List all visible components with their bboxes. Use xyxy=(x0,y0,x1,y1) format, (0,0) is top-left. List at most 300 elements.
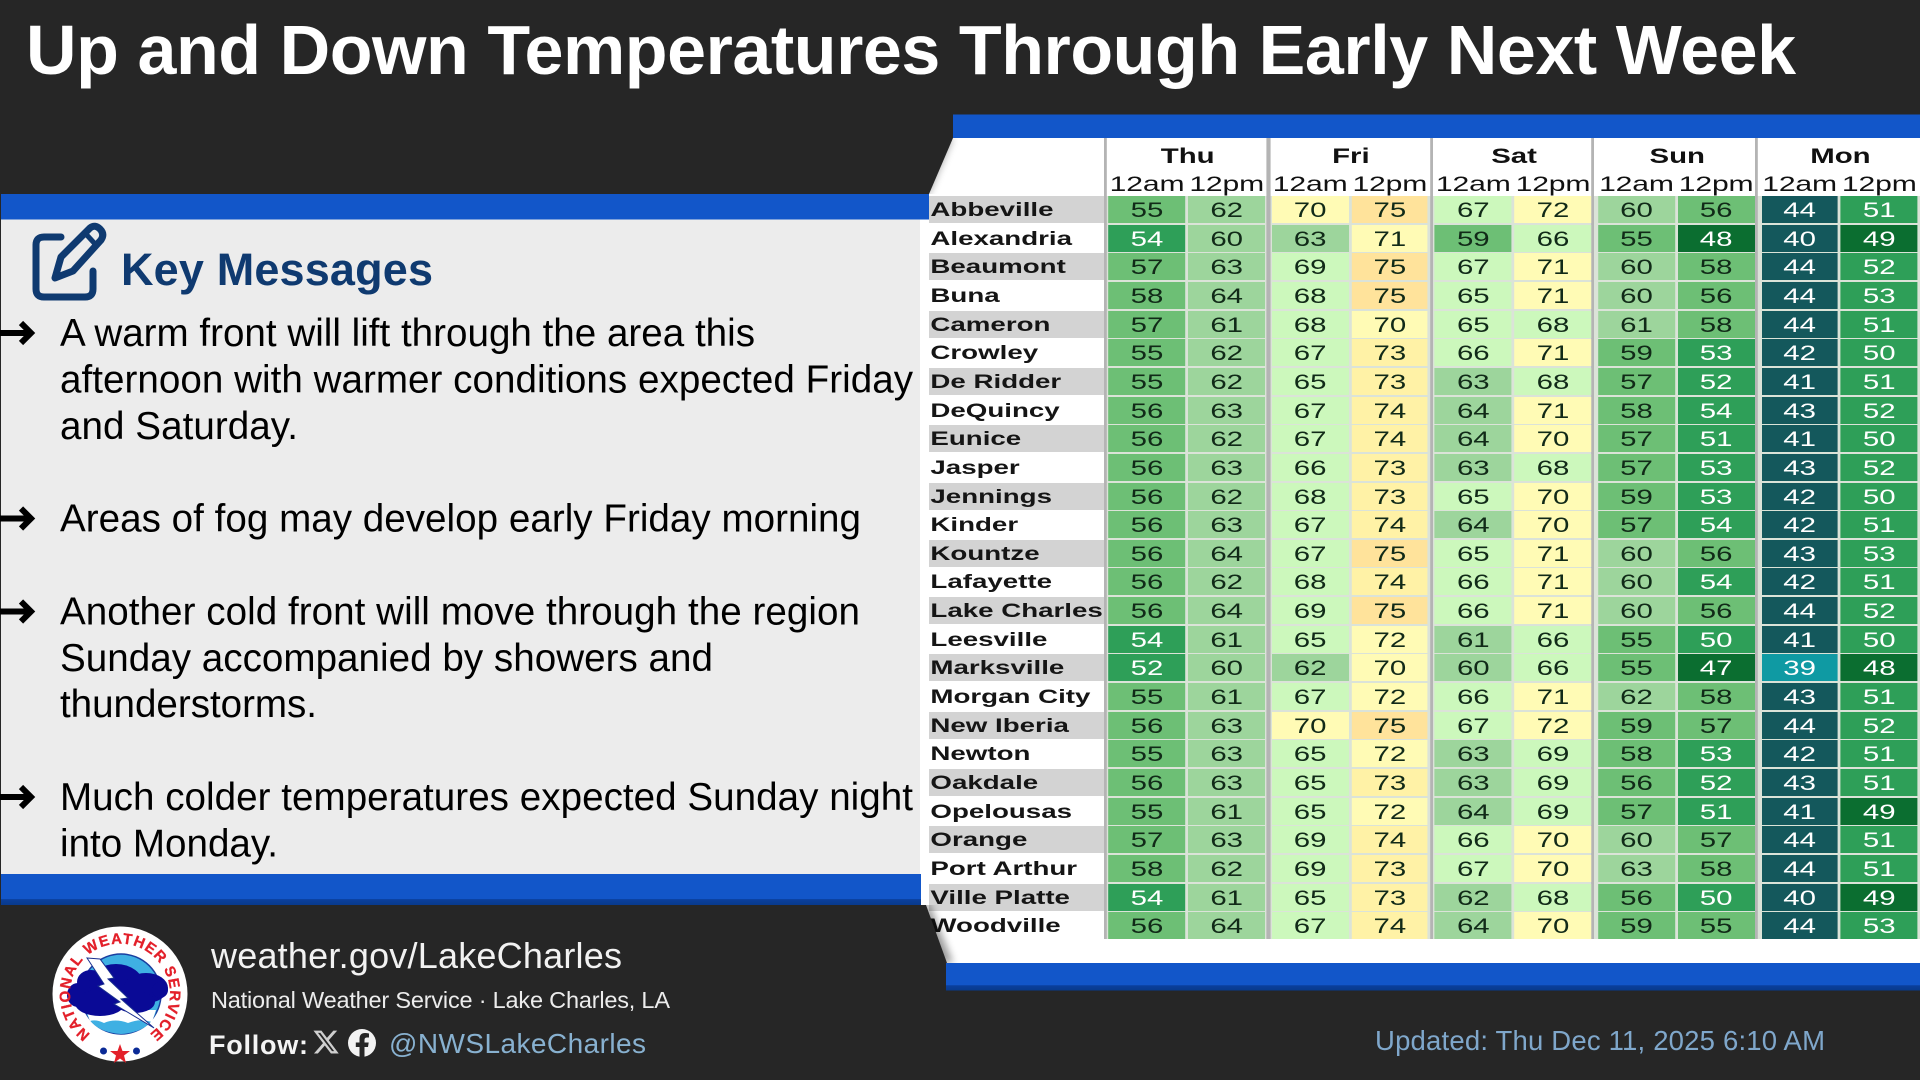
row: Morgan City: 67 xyxy=(1294,686,1327,709)
time headers: 12pm xyxy=(1352,172,1427,196)
row: Cameron: 70 xyxy=(1373,314,1406,337)
row: Oakdale: 56 xyxy=(1131,772,1163,795)
row: Opelousas: 55 xyxy=(1131,801,1163,824)
message 3: thunderstorms. xyxy=(60,683,317,726)
row: Orange: 63 xyxy=(1210,829,1243,852)
row: Lafayette: 71 xyxy=(1537,571,1569,594)
time headers: 12am xyxy=(1110,172,1184,196)
row: Abbeville: 67 xyxy=(1457,199,1490,222)
row: Abbeville xyxy=(929,196,1918,223)
row: Port Arthur: 67 xyxy=(1457,858,1490,881)
day headers: Sun xyxy=(1649,145,1705,168)
row: Buna: Buna xyxy=(930,285,1000,307)
row: Newton: 51 xyxy=(1863,743,1896,766)
row: Cameron xyxy=(929,311,1918,338)
row: Opelousas: 57 xyxy=(1620,801,1653,824)
row: Alexandria: 59 xyxy=(1457,228,1490,251)
row: New Iberia: 63 xyxy=(1210,715,1243,738)
row: Beaumont: 75 xyxy=(1373,256,1406,279)
row: Lafayette: 56 xyxy=(1131,571,1163,594)
row: Abbeville: 62 xyxy=(1210,199,1243,222)
table corner notches xyxy=(920,138,953,993)
website link: weather.gov/LakeCharles xyxy=(210,935,622,976)
row: Kountze: 56 xyxy=(1131,543,1163,566)
row: Leesville: Leesville xyxy=(930,629,1047,651)
row: Woodville: 74 xyxy=(1373,915,1406,938)
row: Morgan City: 62 xyxy=(1620,686,1653,709)
row: Lafayette: Lafayette xyxy=(930,571,1052,593)
row: Ville Platte: 40 xyxy=(1783,887,1816,910)
row: Opelousas: 64 xyxy=(1457,801,1490,824)
row: Alexandria: 48 xyxy=(1700,228,1732,251)
row: Jasper: 66 xyxy=(1294,457,1327,480)
icon: Facebook xyxy=(348,1029,376,1057)
row: DeQuincy: 63 xyxy=(1210,400,1243,423)
row: Newton: Newton xyxy=(930,743,1030,765)
row: Leesville: 61 xyxy=(1457,629,1490,652)
message 1 xyxy=(60,312,914,448)
row: Kountze: 64 xyxy=(1210,543,1243,566)
row: Opelousas: 72 xyxy=(1373,801,1406,824)
row: Lafayette: 42 xyxy=(1783,571,1816,594)
row: Leesville: 50 xyxy=(1863,629,1896,652)
row: Orange: 74 xyxy=(1373,829,1406,852)
row: Abbeville: 55 xyxy=(1131,199,1163,222)
row: Beaumont xyxy=(929,253,1918,280)
row: Buna: 65 xyxy=(1457,285,1490,308)
row: Oakdale: 43 xyxy=(1783,772,1816,795)
row: Jasper: 43 xyxy=(1783,457,1816,480)
row: Port Arthur: 63 xyxy=(1620,858,1653,881)
row: Marksville: 66 xyxy=(1537,657,1569,680)
row: Cameron: 61 xyxy=(1620,314,1653,337)
row: Orange: Orange xyxy=(930,829,1027,851)
temperature table xyxy=(929,138,1920,939)
row: Kinder: 56 xyxy=(1131,514,1163,537)
row: Abbeville: Abbeville xyxy=(930,199,1054,221)
row: Morgan City: 51 xyxy=(1863,686,1896,709)
row: De Ridder: 68 xyxy=(1537,371,1569,394)
row: Ville Platte: 56 xyxy=(1620,887,1653,910)
row: Eunice: 41 xyxy=(1783,428,1816,451)
icon: X xyxy=(313,1031,339,1053)
row: Port Arthur xyxy=(930,855,1918,882)
row: Eunice: 64 xyxy=(1457,428,1490,451)
row: Lafayette: 54 xyxy=(1700,571,1732,594)
row: Ville Platte: Ville Platte xyxy=(930,887,1070,909)
row: Marksville: 47 xyxy=(1700,657,1732,680)
time headers: 12pm xyxy=(1189,172,1264,196)
row: Oakdale: 69 xyxy=(1537,772,1569,795)
row: Leesville: 50 xyxy=(1700,629,1732,652)
row: De Ridder xyxy=(929,368,1918,395)
message 2: Areas of fog may develop early Friday morning xyxy=(60,498,861,541)
row: Port Arthur: 70 xyxy=(1537,858,1569,881)
row: Jasper: 56 xyxy=(1131,457,1163,480)
row: Port Arthur: 44 xyxy=(1783,858,1816,881)
row: Cameron: 44 xyxy=(1783,314,1816,337)
row: Newton: 72 xyxy=(1373,743,1406,766)
row: Leesville: 72 xyxy=(1373,629,1406,652)
row: Jennings: 70 xyxy=(1537,486,1569,508)
row: Crowley: 53 xyxy=(1700,342,1732,365)
message 4: into Monday. xyxy=(60,822,278,865)
row: Crowley: 71 xyxy=(1537,342,1569,365)
row: Woodville: 64 xyxy=(1457,915,1490,938)
row: Oakdale: Oakdale xyxy=(930,772,1038,794)
row: Beaumont: Beaumont xyxy=(930,256,1066,278)
time headers: 12am xyxy=(1273,172,1348,196)
row: Beaumont: 60 xyxy=(1620,256,1653,279)
row: Morgan City: Morgan City xyxy=(930,686,1090,708)
row: Marksville: Marksville xyxy=(930,657,1064,679)
row: Lake Charles: Lake Charles xyxy=(930,600,1103,622)
row: Orange: 44 xyxy=(1783,829,1816,852)
row: Eunice: 70 xyxy=(1537,428,1569,451)
row: Leesville xyxy=(930,626,1918,653)
row: Leesville: 66 xyxy=(1537,629,1569,652)
row: Alexandria: Alexandria xyxy=(930,228,1072,250)
row: Eunice: 67 xyxy=(1294,428,1327,451)
row: Newton xyxy=(930,740,1918,767)
row: Beaumont: 58 xyxy=(1700,256,1732,279)
row: Jasper: 52 xyxy=(1863,457,1896,480)
row: Alexandria: 60 xyxy=(1210,228,1243,251)
row: New Iberia: 52 xyxy=(1863,715,1896,738)
row: Eunice: 50 xyxy=(1863,428,1896,451)
row: New Iberia: 56 xyxy=(1131,715,1163,738)
row: Port Arthur: 58 xyxy=(1700,858,1732,881)
arrow bullet 2 xyxy=(0,508,31,528)
row: Cameron: 57 xyxy=(1131,314,1163,337)
row: Jasper: 73 xyxy=(1373,457,1406,480)
row: Morgan City: 72 xyxy=(1373,686,1406,709)
row: Beaumont: 52 xyxy=(1863,256,1896,279)
row: Beaumont: 57 xyxy=(1131,256,1163,279)
row: Morgan City: 43 xyxy=(1783,686,1816,709)
message 3: Sunday accompanied by showers and xyxy=(60,637,713,680)
row: DeQuincy xyxy=(930,397,1918,424)
row: Kinder xyxy=(930,511,1918,538)
time headers: 12pm xyxy=(1679,172,1753,196)
row: Marksville: 48 xyxy=(1863,657,1896,680)
row: Buna: 58 xyxy=(1131,285,1163,308)
row: Orange: 57 xyxy=(1700,829,1732,852)
row: Kountze: 75 xyxy=(1373,543,1406,566)
row: Ville Platte: 49 xyxy=(1863,887,1896,910)
row: Abbeville: 72 xyxy=(1537,199,1569,222)
row: Eunice: Eunice xyxy=(930,428,1021,450)
row: Beaumont: 44 xyxy=(1783,256,1816,279)
row: Morgan City xyxy=(930,683,1918,710)
row: Cameron: 58 xyxy=(1700,314,1732,337)
row: Ville Platte: 61 xyxy=(1210,887,1243,910)
row: DeQuincy: 54 xyxy=(1700,400,1732,423)
row: Marksville: 39 xyxy=(1783,657,1816,680)
row: Woodville: Woodville xyxy=(930,915,1061,937)
row: Buna: 56 xyxy=(1700,285,1732,308)
row: Jennings: 42 xyxy=(1783,486,1816,508)
time headers: 12pm xyxy=(1516,172,1590,196)
row: Crowley: 55 xyxy=(1131,342,1163,365)
row: DeQuincy: 71 xyxy=(1537,400,1569,423)
row: Cameron: 61 xyxy=(1210,314,1243,337)
row: Opelousas: 49 xyxy=(1863,801,1896,824)
row: Cameron: 68 xyxy=(1537,314,1569,337)
row: Port Arthur: 73 xyxy=(1373,858,1406,881)
row: Jennings: 59 xyxy=(1620,486,1653,508)
row: Abbeville: 56 xyxy=(1700,199,1732,222)
row: DeQuincy: 56 xyxy=(1131,400,1163,423)
row: Woodville: 64 xyxy=(1210,915,1243,938)
row: Kountze: 43 xyxy=(1783,543,1816,566)
row: Alexandria: 71 xyxy=(1373,228,1406,251)
row: Lake Charles: 56 xyxy=(1131,600,1163,623)
icon: National Weather Service logo: NATIONAL WEATHER SERVICE xyxy=(60,933,181,1042)
row: Woodville: 67 xyxy=(1294,915,1327,938)
row: Oakdale xyxy=(929,769,1918,796)
row: Opelousas: 41 xyxy=(1783,801,1816,824)
row: Jennings: 50 xyxy=(1863,486,1896,508)
row: Kountze: 53 xyxy=(1863,543,1896,566)
icon: pencil on square xyxy=(36,226,103,297)
heading: Key Messages: Key Messages xyxy=(121,244,433,295)
row: Kountze: Kountze xyxy=(930,543,1040,565)
row: Opelousas xyxy=(930,798,1918,825)
row: Port Arthur: 62 xyxy=(1210,858,1243,881)
row: Orange: 70 xyxy=(1537,829,1569,852)
row: Kinder: 67 xyxy=(1294,514,1327,537)
row: DeQuincy: 58 xyxy=(1620,400,1653,423)
row: Kinder: 54 xyxy=(1700,514,1732,537)
row: Kountze: 71 xyxy=(1537,543,1569,566)
row: Morgan City: 55 xyxy=(1131,686,1163,709)
row: Newton: 63 xyxy=(1210,743,1243,766)
row: Port Arthur: 69 xyxy=(1294,858,1327,881)
row: New Iberia: 59 xyxy=(1620,715,1653,738)
row: Marksville: 70 xyxy=(1373,657,1406,680)
office name: National Weather Service · Lake Charles, LA xyxy=(211,987,670,1013)
row: Opelousas: 65 xyxy=(1294,801,1327,824)
row: Kinder: 42 xyxy=(1783,514,1816,537)
row: Oakdale: 65 xyxy=(1294,772,1327,795)
row: New Iberia: New Iberia xyxy=(930,715,1069,737)
row: Crowley: 59 xyxy=(1620,342,1653,365)
row: New Iberia: 67 xyxy=(1457,715,1490,738)
row: Jennings: 68 xyxy=(1294,486,1327,508)
row: Marksville: 62 xyxy=(1294,657,1327,680)
row: Alexandria: 66 xyxy=(1537,228,1569,251)
row: Cameron: 65 xyxy=(1457,314,1490,337)
row: De Ridder: 65 xyxy=(1294,371,1327,394)
message 1: afternoon with warmer conditions expected Friday xyxy=(60,358,914,401)
row: Lake Charles: 52 xyxy=(1863,600,1896,623)
row: Kinder: 51 xyxy=(1863,514,1896,537)
row: Jasper xyxy=(930,454,1918,481)
row: Morgan City: 58 xyxy=(1700,686,1732,709)
row: DeQuincy: 74 xyxy=(1373,400,1406,423)
row: Lake Charles: 64 xyxy=(1210,600,1243,623)
time headers: 12pm xyxy=(1842,172,1917,196)
row: Lafayette: 60 xyxy=(1620,571,1653,594)
row: Eunice xyxy=(929,425,1918,452)
row: Buna: 64 xyxy=(1210,285,1243,308)
row: Woodville xyxy=(930,912,1918,939)
row: Woodville: 70 xyxy=(1537,915,1569,938)
row: Marksville: 52 xyxy=(1131,657,1163,680)
row: Kinder: 74 xyxy=(1373,514,1406,537)
row: Opelousas: 69 xyxy=(1537,801,1569,824)
row: Alexandria: 40 xyxy=(1783,228,1816,251)
follow label: Follow: xyxy=(209,1030,308,1060)
row: Eunice: 57 xyxy=(1620,428,1653,451)
row: New Iberia: 70 xyxy=(1294,715,1327,738)
row: Abbeville: 44 xyxy=(1783,199,1816,222)
row: Ville Platte: 68 xyxy=(1537,887,1569,910)
row: Marksville: 55 xyxy=(1620,657,1653,680)
row: Crowley: 73 xyxy=(1373,342,1406,365)
row: Kinder: Kinder xyxy=(930,514,1018,536)
row: Jennings xyxy=(929,483,1918,510)
row: Alexandria: 49 xyxy=(1863,228,1896,251)
row: Jasper: 53 xyxy=(1700,457,1732,480)
row: DeQuincy: 67 xyxy=(1294,400,1327,423)
row: Kinder: 70 xyxy=(1537,514,1569,537)
row: Eunice: 74 xyxy=(1373,428,1406,451)
row: Ville Platte: 62 xyxy=(1457,887,1490,910)
row: De Ridder: 57 xyxy=(1620,371,1653,394)
message 1: and Saturday. xyxy=(60,405,298,448)
title: Up and Down Temperatures Through Early Next Week xyxy=(26,11,1796,89)
row: New Iberia xyxy=(929,712,1918,739)
row: Ville Platte: 50 xyxy=(1700,887,1732,910)
row: Beaumont: 71 xyxy=(1537,256,1569,279)
row: Jasper: 63 xyxy=(1457,457,1490,480)
row: Port Arthur: 58 xyxy=(1131,858,1163,881)
row: Alexandria: 55 xyxy=(1620,228,1653,251)
row: Lake Charles: 75 xyxy=(1373,600,1406,623)
row: De Ridder: 73 xyxy=(1373,371,1406,394)
row: Marksville xyxy=(929,654,1918,681)
row: Jasper: 68 xyxy=(1537,457,1569,480)
row: Abbeville: 60 xyxy=(1620,199,1653,222)
row: Leesville: 41 xyxy=(1783,629,1816,652)
row: Ville Platte: 73 xyxy=(1373,887,1406,910)
row: Buna: 75 xyxy=(1373,285,1406,308)
message 4 xyxy=(60,776,913,865)
arrow bullet 1 xyxy=(0,323,31,343)
row: Oakdale: 63 xyxy=(1210,772,1243,795)
row: Newton: 69 xyxy=(1537,743,1569,766)
row: Oakdale: 56 xyxy=(1620,772,1653,795)
row: Morgan City: 71 xyxy=(1537,686,1569,709)
row: Kinder: 57 xyxy=(1620,514,1653,537)
row: Newton: 55 xyxy=(1131,743,1163,766)
row: Beaumont: 69 xyxy=(1294,256,1327,279)
row: Jennings: 53 xyxy=(1700,486,1732,508)
row: Crowley: 67 xyxy=(1294,342,1327,365)
row: Alexandria xyxy=(930,225,1918,252)
row: Cameron: 68 xyxy=(1294,314,1327,337)
row: Eunice: 62 xyxy=(1210,428,1243,451)
row: Buna: 68 xyxy=(1294,285,1327,308)
row: De Ridder: 51 xyxy=(1863,371,1896,394)
row: Ville Platte xyxy=(929,884,1918,911)
row: Oakdale: 51 xyxy=(1863,772,1896,795)
row: Lake Charles: 69 xyxy=(1294,600,1327,623)
row: Port Arthur: 51 xyxy=(1863,858,1896,881)
row: Newton: 42 xyxy=(1783,743,1816,766)
row: DeQuincy: 64 xyxy=(1457,400,1490,423)
row: DeQuincy: 43 xyxy=(1783,400,1816,423)
row: Crowley: 50 xyxy=(1863,342,1896,365)
row: Cameron: 51 xyxy=(1863,314,1896,337)
row: Beaumont: 63 xyxy=(1210,256,1243,279)
row: Crowley xyxy=(930,339,1918,366)
row: Newton: 65 xyxy=(1294,743,1327,766)
row: Abbeville: 51 xyxy=(1863,199,1896,222)
row: Kountze: 56 xyxy=(1700,543,1732,566)
row: De Ridder: De Ridder xyxy=(930,371,1061,393)
row: Buna xyxy=(930,282,1918,309)
row: Lake Charles: 60 xyxy=(1620,600,1653,623)
time headers: 12am xyxy=(1599,172,1674,196)
row: Lafayette: 62 xyxy=(1210,571,1243,594)
row: Opelousas: 51 xyxy=(1700,801,1732,824)
row: Port Arthur: Port Arthur xyxy=(930,858,1077,880)
row: Buna: 71 xyxy=(1537,285,1569,308)
row: Alexandria: 54 xyxy=(1131,228,1163,251)
row: Jennings: 65 xyxy=(1457,486,1490,508)
row: New Iberia: 44 xyxy=(1783,715,1816,738)
row: Abbeville: 70 xyxy=(1294,199,1327,222)
message 1: A warm front will lift through the area this xyxy=(60,312,755,355)
row: Kountze: 60 xyxy=(1620,543,1653,566)
row: Morgan City: 61 xyxy=(1210,686,1243,709)
row: Eunice: 51 xyxy=(1700,428,1732,451)
message 3: Another cold front will move through the region xyxy=(60,590,860,633)
row: De Ridder: 62 xyxy=(1210,371,1243,394)
row: Orange: 57 xyxy=(1131,829,1163,852)
row: Crowley: Crowley xyxy=(930,342,1038,364)
row: Buna: 53 xyxy=(1863,285,1896,308)
row: Kinder: 64 xyxy=(1457,514,1490,537)
time headers xyxy=(1110,172,1917,196)
row: Orange: 69 xyxy=(1294,829,1327,852)
row: Woodville: 55 xyxy=(1700,915,1732,938)
row: Woodville: 59 xyxy=(1620,915,1653,938)
row: Lafayette: 74 xyxy=(1373,571,1406,594)
row: Leesville: 54 xyxy=(1131,629,1163,652)
row: Lake Charles: 71 xyxy=(1537,600,1569,623)
row: Oakdale: 73 xyxy=(1373,772,1406,795)
row: Kountze: 65 xyxy=(1457,543,1490,566)
row: Abbeville: 75 xyxy=(1373,199,1406,222)
row: Lake Charles: 56 xyxy=(1700,600,1732,623)
time headers: 12am xyxy=(1436,172,1511,196)
row: Jasper: 63 xyxy=(1210,457,1243,480)
row: Crowley: 62 xyxy=(1210,342,1243,365)
row: Kountze xyxy=(929,540,1918,567)
row: De Ridder: 52 xyxy=(1700,371,1732,394)
row: Jasper: Jasper xyxy=(930,457,1020,479)
row: Leesville: 61 xyxy=(1210,629,1243,652)
row: Woodville: 44 xyxy=(1783,915,1816,938)
row: Marksville: 60 xyxy=(1457,657,1490,680)
row: New Iberia: 72 xyxy=(1537,715,1569,738)
row: Oakdale: 52 xyxy=(1700,772,1732,795)
row: New Iberia: 57 xyxy=(1700,715,1732,738)
